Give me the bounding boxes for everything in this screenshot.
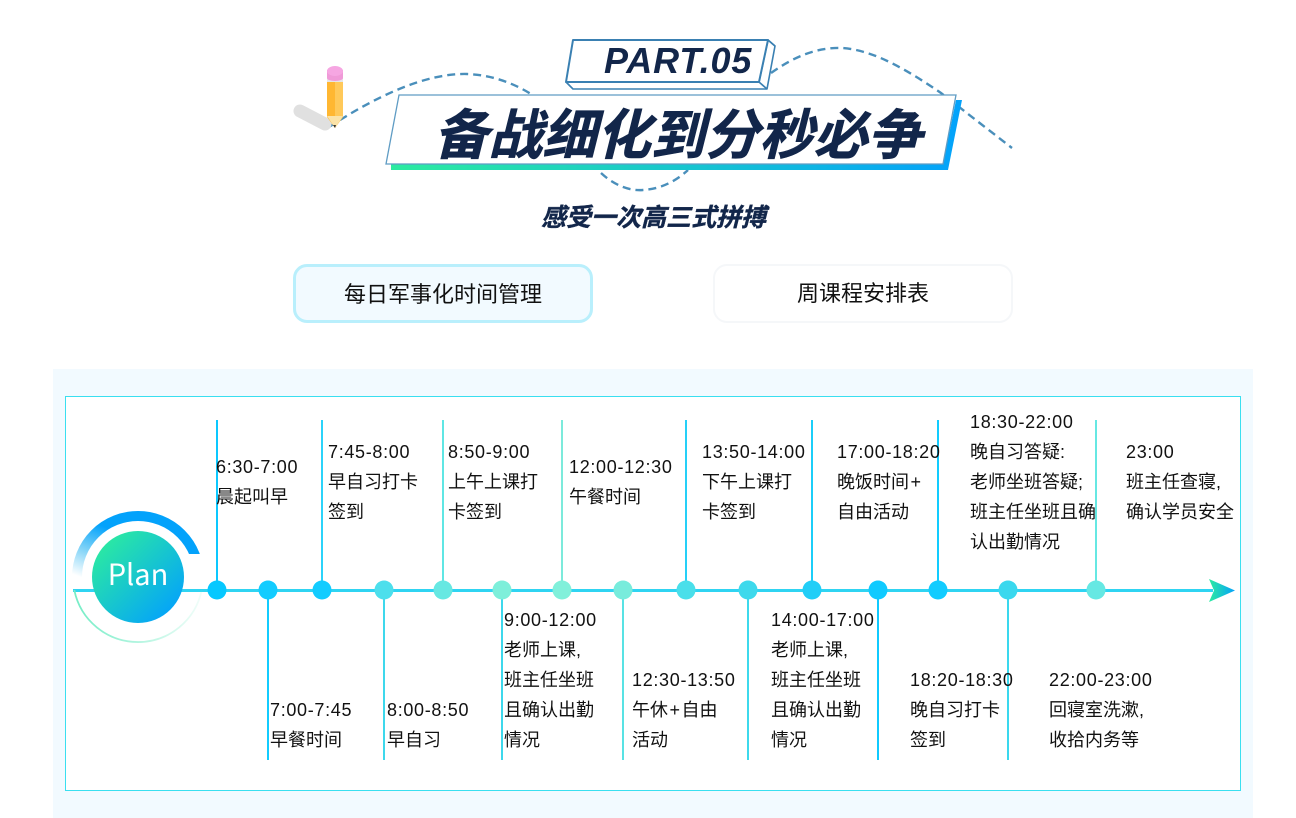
label 8:50 xyxy=(448,442,538,522)
label 8:50: 卡签到 xyxy=(448,502,502,522)
label 8:00: 8:00-8:50 xyxy=(387,700,469,720)
label 14:00: 情况 xyxy=(771,730,807,750)
label 9:00: 且确认出勤 xyxy=(504,700,594,720)
label 18:30: 班主任坐班且确 xyxy=(970,502,1096,522)
label 13:50: 卡签到 xyxy=(702,502,756,522)
label 8:00: 早自习 xyxy=(387,730,441,750)
vertical ticks xyxy=(217,420,1096,760)
timeline chart xyxy=(72,420,1235,760)
label 17:00: 晚饭时间+ xyxy=(837,472,921,492)
label 9:00: 情况 xyxy=(504,730,540,750)
plan badge xyxy=(74,516,202,642)
PART label box xyxy=(566,40,775,89)
panel: timeline background xyxy=(53,369,1253,818)
label 7:00 xyxy=(270,700,352,750)
label 14:00: 且确认出勤 xyxy=(771,700,861,720)
label 18:20: 晚自习打卡 xyxy=(910,700,1000,720)
label 18:30: 老师坐班答疑; xyxy=(970,472,1083,492)
label 12:00: 午餐时间 xyxy=(569,487,641,507)
label 14:00: 老师上课, xyxy=(771,640,848,660)
label 22:00 xyxy=(1049,670,1153,750)
label 22:00: 22:00-23:00 xyxy=(1049,670,1153,690)
label 13:50 xyxy=(702,442,806,522)
label 12:00: 12:00-12:30 xyxy=(569,457,673,477)
icon: pencil xyxy=(300,66,343,128)
tab: daily time management: 每日军事化时间管理 xyxy=(344,282,542,307)
arrow head xyxy=(1209,579,1235,602)
label 8:50: 8:50-9:00 xyxy=(448,442,530,462)
label 23:00: 班主任查寝, xyxy=(1126,472,1221,492)
label 23:00: 23:00 xyxy=(1126,442,1174,462)
label 14:00 xyxy=(771,610,875,750)
label 17:00 xyxy=(837,442,941,522)
label 12:30: 12:30-13:50 xyxy=(632,670,736,690)
label 7:00: 7:00-7:45 xyxy=(270,700,352,720)
timeline dots xyxy=(208,580,1106,600)
label 18:30: 认出勤情况 xyxy=(970,532,1060,552)
label 12:00 xyxy=(569,457,673,507)
label 18:30 xyxy=(970,412,1096,552)
label 9:00: 老师上课, xyxy=(504,640,581,660)
label 7:45: 7:45-8:00 xyxy=(328,442,410,462)
label 18:30: 晚自习答疑: xyxy=(970,442,1065,462)
header graphic xyxy=(294,39,1013,192)
tab: weekly schedule: 周课程安排表 xyxy=(797,281,929,306)
heading: main title: 备战细化到分秒必争 xyxy=(434,106,922,166)
label 12:30: 午休+自由 xyxy=(632,700,718,720)
label 6:30: 6:30-7:00 xyxy=(216,457,298,477)
tab: weekly schedule xyxy=(713,264,1013,323)
label 17:00: 17:00-18:20 xyxy=(837,442,941,462)
label 6:30 xyxy=(216,457,298,507)
tab: daily time management xyxy=(293,264,593,323)
label 14:00: 班主任坐班 xyxy=(771,670,861,690)
label 12:30: 活动 xyxy=(632,730,668,750)
label 9:00: 9:00-12:00 xyxy=(504,610,597,630)
label 7:00: 早餐时间 xyxy=(270,730,342,750)
label 18:20 xyxy=(910,670,1014,750)
label 7:45: 签到 xyxy=(328,502,364,522)
label 18:30: 18:30-22:00 xyxy=(970,412,1074,432)
label 22:00: 收拾内务等 xyxy=(1049,730,1139,750)
panel: timeline frame xyxy=(65,396,1241,791)
label 14:00: 14:00-17:00 xyxy=(771,610,875,630)
label 8:00 xyxy=(387,700,469,750)
label 17:00: 自由活动 xyxy=(837,502,909,522)
label 23:00 xyxy=(1126,442,1234,522)
plan badge: Plan xyxy=(108,552,168,594)
title gradient shadow xyxy=(391,100,962,170)
heading: subtitle: 感受一次高三式拼搏 xyxy=(541,204,766,232)
dashed flight path xyxy=(329,48,1012,190)
heading: part number: PART.05 xyxy=(604,40,752,81)
label 9:00: 班主任坐班 xyxy=(504,670,594,690)
label 7:45 xyxy=(328,442,418,522)
label 8:50: 上午上课打 xyxy=(448,472,538,492)
label 18:20: 签到 xyxy=(910,730,946,750)
label 22:00: 回寝室洗漱, xyxy=(1049,700,1144,720)
label 23:00: 确认学员安全 xyxy=(1126,502,1234,522)
label 18:20: 18:20-18:30 xyxy=(910,670,1014,690)
label 13:50: 13:50-14:00 xyxy=(702,442,806,462)
axis line xyxy=(73,589,1213,592)
title box xyxy=(386,95,956,164)
label 13:50: 下午上课打 xyxy=(702,472,792,492)
label 12:30 xyxy=(632,670,736,750)
label 6:30: 晨起叫早 xyxy=(216,487,288,507)
label 7:45: 早自习打卡 xyxy=(328,472,418,492)
label 9:00 xyxy=(504,610,597,750)
